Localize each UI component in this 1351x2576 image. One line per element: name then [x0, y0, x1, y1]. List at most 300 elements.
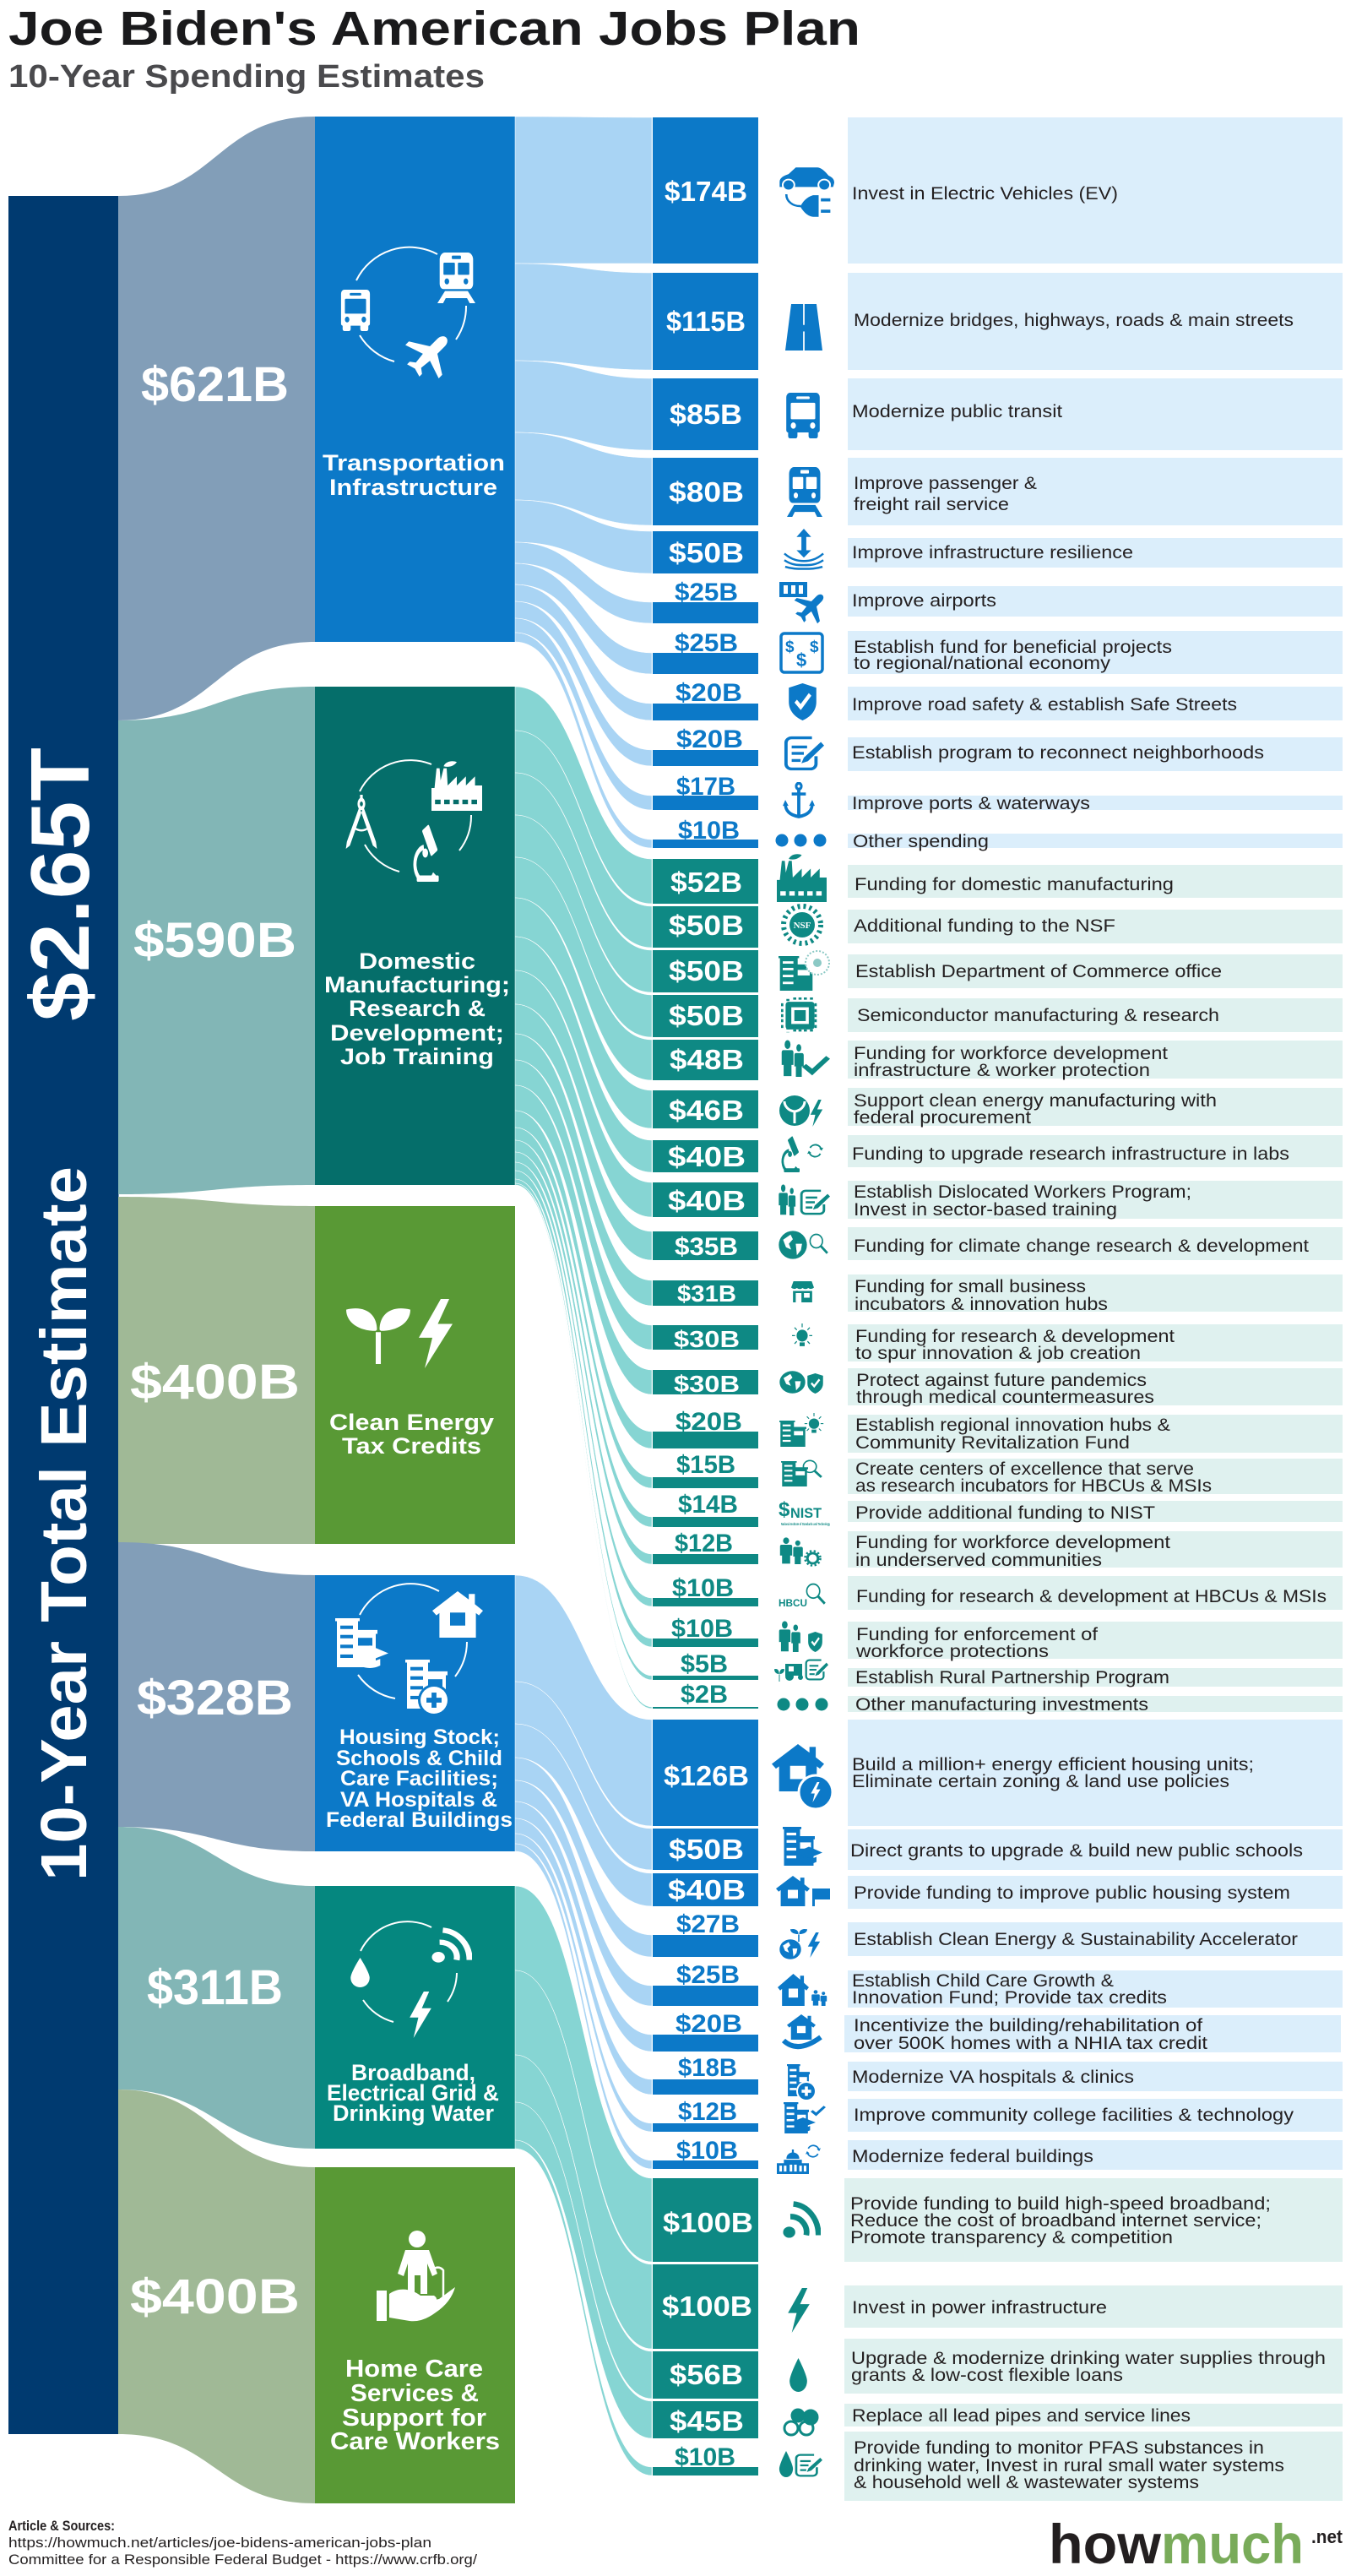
row: $50B resilience	[653, 529, 1343, 573]
row: $25B child care	[653, 1961, 1343, 2008]
description	[848, 1501, 1343, 1523]
description: Improve community college facilities & technology	[854, 2106, 1294, 2125]
description: Establish Clean Energy & Sustainability Accelerator	[854, 1930, 1298, 1949]
icon: dots	[777, 1698, 827, 1711]
category label: Broadband,	[351, 2060, 475, 2085]
description: Provide funding to improve public housing system	[854, 1883, 1290, 1903]
row: $80B rail	[653, 458, 1343, 525]
category label: Care Workers	[330, 2428, 500, 2455]
description	[848, 1324, 1343, 1363]
icon: bolt	[419, 1299, 453, 1368]
row: $52B domestic manufacturing	[653, 854, 1343, 904]
icon: globe, sprout, bolt	[779, 1929, 820, 1959]
description	[848, 378, 1343, 450]
description: to regional/national economy	[854, 654, 1111, 673]
description	[848, 2062, 1343, 2091]
description: Provide funding to build high-speed broadband;	[850, 2194, 1271, 2214]
description	[848, 1459, 1343, 1496]
value	[653, 1574, 758, 1606]
description: Create centers of excellence that serve	[855, 1459, 1194, 1479]
value: $46B	[669, 1095, 744, 1126]
row: $30B innovation	[653, 1323, 1343, 1363]
description: drinking water, Invest in rural small water systems	[854, 2456, 1284, 2475]
description	[848, 1622, 1343, 1661]
icon: document	[786, 738, 824, 769]
description: Establish fund for beneficial projects	[854, 638, 1172, 657]
value	[653, 2178, 758, 2262]
description	[848, 1531, 1343, 1570]
title: Joe Biden's American Jobs Plan	[8, 2, 860, 56]
total value: $2.65T	[14, 747, 106, 1021]
value: $174B	[665, 176, 747, 207]
description	[848, 1415, 1343, 1453]
icon: caregiver hand with elder	[377, 2231, 455, 2321]
description: Establish regional innovation hubs &	[855, 1416, 1170, 1435]
icon: capitol and refresh	[777, 2145, 821, 2174]
category label: Research &	[349, 996, 486, 1021]
row: $2B other manufacturing	[653, 1681, 1343, 1715]
row: $20B road safety	[653, 679, 1343, 720]
description: Eliminate certain zoning & land use policies	[852, 1772, 1229, 1791]
icon: factory	[431, 761, 482, 811]
value	[653, 950, 758, 992]
icon: school	[335, 1618, 388, 1668]
icon: HBCU	[779, 1584, 825, 1609]
icon: NIST: NIST	[790, 1505, 822, 1521]
value: $18B	[678, 2054, 737, 2082]
value: $45B	[670, 2405, 744, 2437]
description: Establish program to reconnect neighborhoods	[852, 743, 1264, 763]
description	[848, 832, 1343, 851]
icon: bulb	[792, 1323, 812, 1346]
row: $100B power	[653, 2264, 1343, 2349]
row: $27B sustainability accelerator	[653, 1910, 1343, 1959]
description: Community Revitalization Fund	[855, 1433, 1130, 1453]
category label: Job Training	[340, 1044, 494, 1069]
icon: resilience	[784, 529, 823, 569]
row: $12B underserved	[653, 1530, 1343, 1570]
category label: Housing Stock;	[339, 1725, 500, 1749]
description: incubators & innovation hubs	[855, 1295, 1108, 1314]
value	[653, 1325, 758, 1352]
description	[848, 1368, 1343, 1407]
logo: howmuch.net: how	[1049, 2513, 1162, 2575]
sources	[8, 2518, 477, 2568]
category label: Clean Energy	[329, 1410, 494, 1435]
value	[653, 2264, 758, 2349]
description: federal procurement	[854, 1108, 1031, 1128]
category label: VA Hospitals &	[340, 1788, 497, 1812]
description	[848, 2099, 1343, 2132]
value: $621B: $621B	[141, 357, 289, 412]
value	[653, 1681, 758, 1709]
icon: hospital	[405, 1660, 450, 1716]
panel: domestic manufacturing	[315, 687, 515, 1185]
icon: NIST: National Institute of Standards and Technology	[781, 1522, 830, 1526]
description: Other manufacturing investments	[855, 1695, 1148, 1715]
flow: clean energy	[118, 1197, 315, 1544]
row: $5B rural	[653, 1650, 1343, 1687]
value	[653, 1090, 758, 1128]
icon: commerce office	[779, 951, 829, 991]
value	[653, 273, 758, 370]
flow: home care	[118, 2090, 315, 2503]
value: $56B	[670, 2359, 743, 2390]
panel: housing, schools, hospitals	[315, 1575, 515, 1851]
value: $100B	[662, 2291, 752, 2322]
row: $40B public housing	[653, 1873, 1343, 1909]
category label: Manufacturing;	[324, 972, 510, 997]
description: Innovation Fund; Provide tax credits	[852, 1988, 1167, 2008]
value: $25B	[675, 629, 738, 657]
value: $10B	[676, 2137, 738, 2165]
icon: hospital	[787, 2064, 817, 2101]
icon: bus	[786, 393, 820, 438]
value: $50B	[669, 910, 744, 941]
value: $35B	[675, 1233, 738, 1261]
description: Promote transparency & competition	[850, 2228, 1173, 2247]
row: $20B neighborhoods	[653, 726, 1343, 771]
icon: bolt	[410, 1992, 431, 2038]
value	[653, 1873, 758, 1906]
category label: Electrical Grid &	[327, 2080, 499, 2106]
description: Invest in Electric Vehicles (EV)	[852, 184, 1118, 204]
description: Protect against future pandemics	[856, 1371, 1147, 1390]
description	[848, 1695, 1343, 1715]
icon: road	[785, 304, 822, 351]
row: $18B VA hospitals	[653, 2054, 1343, 2101]
value	[653, 859, 758, 904]
row: $50B semiconductors	[653, 995, 1343, 1037]
description	[844, 2404, 1343, 2427]
description: Improve road safety & establish Safe Streets	[852, 695, 1237, 715]
icon: wifi	[783, 2204, 818, 2238]
category label: Development;	[330, 1020, 504, 1046]
category label: Domestic	[359, 948, 475, 974]
icon: plane	[405, 336, 448, 378]
subtitle: 10-Year Spending Estimates	[8, 59, 485, 95]
description	[848, 631, 1343, 674]
value: $30B	[674, 1371, 740, 1397]
panel: broadband, grid, water	[315, 1886, 515, 2149]
icon: sprout	[346, 1308, 410, 1364]
icon: globe and shield	[779, 1371, 823, 1394]
value: $25B	[676, 1961, 740, 1989]
description: Funding to upgrade research infrastructure in labs	[852, 1144, 1289, 1164]
value: $50B	[669, 1000, 744, 1031]
row: $10B federal buildings	[653, 2137, 1343, 2174]
value: $80B	[669, 476, 744, 508]
value: $31B	[677, 1280, 736, 1307]
description	[848, 1720, 1343, 1826]
icon: water drop	[789, 2358, 807, 2392]
description	[848, 1668, 1343, 1687]
category label	[327, 2060, 499, 2126]
value: $12B	[678, 2098, 737, 2126]
row: $174B electric vehicles	[653, 117, 1343, 264]
panel: home care	[315, 2167, 515, 2503]
flow: manufacturing	[118, 687, 315, 1194]
description: Build a million+ energy efficient housing units;	[852, 1755, 1254, 1774]
sankey ribbons: manufacturing	[515, 687, 652, 1709]
description: grants & low-cost flexible loans	[851, 2366, 1123, 2385]
description: Establish Child Care Growth &	[852, 1971, 1114, 1991]
category label	[323, 450, 505, 500]
value: $25B	[675, 579, 738, 606]
value: $5B	[681, 1650, 728, 1678]
icon: building and magnifier	[781, 1460, 822, 1486]
value	[653, 579, 758, 623]
value	[653, 2137, 758, 2169]
value	[653, 726, 758, 766]
value: $50B	[669, 537, 744, 568]
icon: workers and document	[779, 1184, 830, 1215]
sources: https://howmuch.net/articles/joe-bidens-american-jobs-plan	[8, 2535, 431, 2551]
description	[848, 1970, 1343, 2008]
description	[848, 1922, 1343, 1956]
row: $126B housing units	[653, 1720, 1343, 1826]
row: $115B roads	[653, 273, 1343, 370]
description: Direct grants to upgrade & build new public schools	[850, 1841, 1303, 1861]
icon: college and check	[784, 2102, 826, 2133]
description: over 500K homes with a NHIA tax credit	[854, 2034, 1207, 2053]
value	[653, 117, 758, 264]
value	[653, 1910, 758, 1957]
value	[653, 531, 758, 573]
value: $14B	[678, 1491, 738, 1519]
description: Establish Department of Commerce office	[855, 962, 1222, 981]
icon: house and family	[778, 1974, 827, 2006]
description: Modernize VA hospitals & clinics	[852, 2068, 1134, 2087]
row: $15B centers of excellence	[653, 1451, 1343, 1496]
category label: Drinking Water	[333, 2100, 494, 2126]
icon: building and bulb	[779, 1413, 823, 1447]
description: Establish Dislocated Workers Program;	[854, 1182, 1191, 1202]
row: $25B beneficial projects	[653, 629, 1343, 674]
category label: Home Care	[345, 2356, 483, 2383]
description: Invest in sector-based training	[854, 1200, 1117, 1220]
value: $400B: $400B	[130, 1355, 300, 1410]
icon: tractor and document	[774, 1660, 828, 1682]
icon: anchor	[783, 783, 815, 817]
description: Improve ports & waterways	[852, 794, 1090, 813]
description	[848, 1227, 1343, 1260]
row: $20B NHIA	[653, 2010, 1341, 2053]
description	[848, 538, 1343, 568]
description: Improve passenger &	[854, 474, 1037, 493]
icon: workers and check	[782, 1040, 830, 1077]
description: Additional funding to the NSF	[854, 916, 1115, 936]
icon: train	[437, 253, 475, 303]
description: Invest in power infrastructure	[852, 2298, 1107, 2318]
icon: pipes	[784, 2409, 818, 2435]
value	[653, 629, 758, 674]
description: workforce protections	[855, 1642, 1049, 1661]
row: $10B PFAS	[653, 2432, 1343, 2501]
description	[848, 1041, 1343, 1080]
value: $17B	[676, 773, 735, 801]
value: $12B	[675, 1530, 733, 1557]
icon: wifi	[431, 1930, 469, 1963]
icon: train	[787, 467, 822, 517]
icon: NIST: $	[779, 1498, 790, 1521]
description: Funding for research & development	[855, 1327, 1175, 1346]
value	[653, 1231, 758, 1261]
category label	[330, 2356, 500, 2455]
sources: Article & Sources:	[8, 2518, 115, 2534]
value	[653, 1182, 758, 1217]
value: $15B	[676, 1451, 735, 1479]
icon: dollars	[781, 633, 822, 672]
row: $46B clean energy	[653, 1088, 1343, 1128]
description	[848, 1088, 1343, 1128]
category label	[326, 1725, 513, 1832]
value	[653, 1650, 758, 1680]
description	[844, 2432, 1343, 2501]
description: Funding for workforce development	[855, 1533, 1170, 1552]
value: $311B: $311B	[147, 1960, 283, 2015]
value: $590B: $590B	[133, 913, 296, 968]
category label: Care Facilities;	[340, 1767, 498, 1791]
description: Funding for domestic manufacturing	[855, 875, 1174, 894]
flow: housing	[118, 1542, 315, 1851]
icon: NIST	[779, 1498, 830, 1526]
description	[844, 2285, 1343, 2328]
icon: compass	[346, 795, 377, 849]
value	[653, 1370, 758, 1397]
row: $10B enforcement	[653, 1615, 1343, 1661]
icon: NSF: NSF	[794, 921, 811, 931]
sources: Committee for a Responsible Federal Budget - https://www.crfb.org/	[8, 2552, 477, 2568]
value: $48B	[670, 1044, 744, 1075]
row: $17B ports	[653, 773, 1343, 817]
row: $35B climate	[653, 1227, 1343, 1261]
sankey ribbons: transportation	[515, 117, 652, 848]
value: $100B	[663, 2207, 753, 2238]
value: $2B	[681, 1681, 728, 1709]
value	[653, 1280, 758, 1307]
description: freight rail service	[854, 495, 1009, 514]
description	[848, 687, 1343, 720]
value: $40B	[668, 1874, 746, 1905]
flow: broadband	[118, 1827, 315, 2149]
description: Provide additional funding to NIST	[855, 1503, 1155, 1523]
value: $40B	[668, 1185, 746, 1216]
value: $10B	[678, 817, 740, 845]
icon: workers and shield	[779, 1621, 822, 1652]
icon: chip	[781, 997, 819, 1034]
row: $25B airports	[653, 579, 1343, 623]
description: Funding for workforce development	[854, 1044, 1168, 1063]
value	[653, 2351, 758, 2399]
value	[653, 2443, 758, 2475]
value	[653, 2010, 758, 2052]
description: Funding for small business	[855, 1277, 1086, 1296]
value	[653, 2098, 758, 2132]
description	[848, 1181, 1343, 1220]
description: to spur innovation & job creation	[855, 1344, 1141, 1363]
icon: dollars: $	[796, 649, 806, 671]
value: $40B	[668, 1141, 746, 1172]
value	[653, 458, 758, 525]
category label: Services &	[350, 2380, 479, 2407]
description	[848, 954, 1343, 988]
row: $50B schools	[653, 1827, 1343, 1870]
row: $10B HBCUs	[653, 1574, 1343, 1610]
description	[848, 865, 1343, 898]
panel: clean energy tax credits	[315, 1206, 515, 1544]
description: Semiconductor manufacturing & research	[857, 1006, 1219, 1025]
icon: EV	[779, 167, 834, 217]
icon: house and flag	[776, 1876, 830, 1906]
value: $20B	[676, 2010, 742, 2038]
icon: house	[432, 1591, 483, 1638]
icon: store	[791, 1281, 814, 1302]
icon: dollars: $	[810, 639, 819, 656]
value	[653, 817, 758, 848]
description: Modernize federal buildings	[852, 2147, 1093, 2166]
description: Funding for climate change research & development	[854, 1236, 1309, 1256]
value: $27B	[676, 1910, 740, 1938]
description	[844, 2339, 1343, 2394]
value	[653, 679, 758, 720]
panel: total bar	[8, 196, 118, 2434]
row: $31B small business	[653, 1274, 1343, 1314]
description: Funding for research & development at HBCUs & MSIs	[856, 1587, 1327, 1606]
logo: howmuch.net	[1049, 2513, 1343, 2575]
icon: NSF	[784, 906, 821, 943]
value: $30B	[674, 1326, 740, 1352]
description: as research incubators for HBCUs & MSIs	[855, 1476, 1212, 1496]
description	[848, 117, 1343, 264]
description: in underserved communities	[855, 1551, 1102, 1570]
value: $50B	[669, 955, 744, 986]
row: $40B dislocated workers	[653, 1181, 1343, 1220]
icon: house in hand	[784, 2014, 821, 2046]
row: $30B pandemics	[653, 1368, 1343, 1407]
description	[848, 458, 1343, 525]
description: Replace all lead pipes and service lines	[852, 2406, 1191, 2426]
description	[844, 2015, 1341, 2053]
value: $10B	[672, 1574, 734, 1602]
description: Establish Rural Partnership Program	[855, 1668, 1169, 1687]
value	[653, 1530, 758, 1564]
icon: microscope	[415, 824, 439, 882]
value: $50B	[669, 1834, 744, 1865]
row: $50B commerce	[653, 950, 1343, 992]
description	[844, 2178, 1343, 2262]
icon: dollars: $	[785, 639, 795, 656]
icon: leaf and bolt	[779, 1095, 822, 1127]
value	[653, 995, 758, 1037]
sankey ribbons: housing	[515, 1575, 652, 2169]
description	[848, 1135, 1343, 1167]
row: $12B community college	[653, 2098, 1343, 2133]
row: $48B workforce	[653, 1040, 1343, 1080]
description: Improve airports	[852, 591, 996, 611]
value: $10B	[671, 1615, 733, 1643]
value	[653, 1615, 758, 1647]
description	[848, 1274, 1343, 1314]
flow: transportation	[118, 117, 315, 720]
value	[653, 378, 758, 450]
logo: howmuch.net: much	[1161, 2513, 1304, 2575]
value	[653, 1451, 758, 1488]
icon: globe and magnifier	[779, 1231, 827, 1259]
description: Provide funding to monitor PFAS substances in	[854, 2438, 1264, 2458]
description	[848, 910, 1343, 943]
value	[653, 1040, 758, 1080]
